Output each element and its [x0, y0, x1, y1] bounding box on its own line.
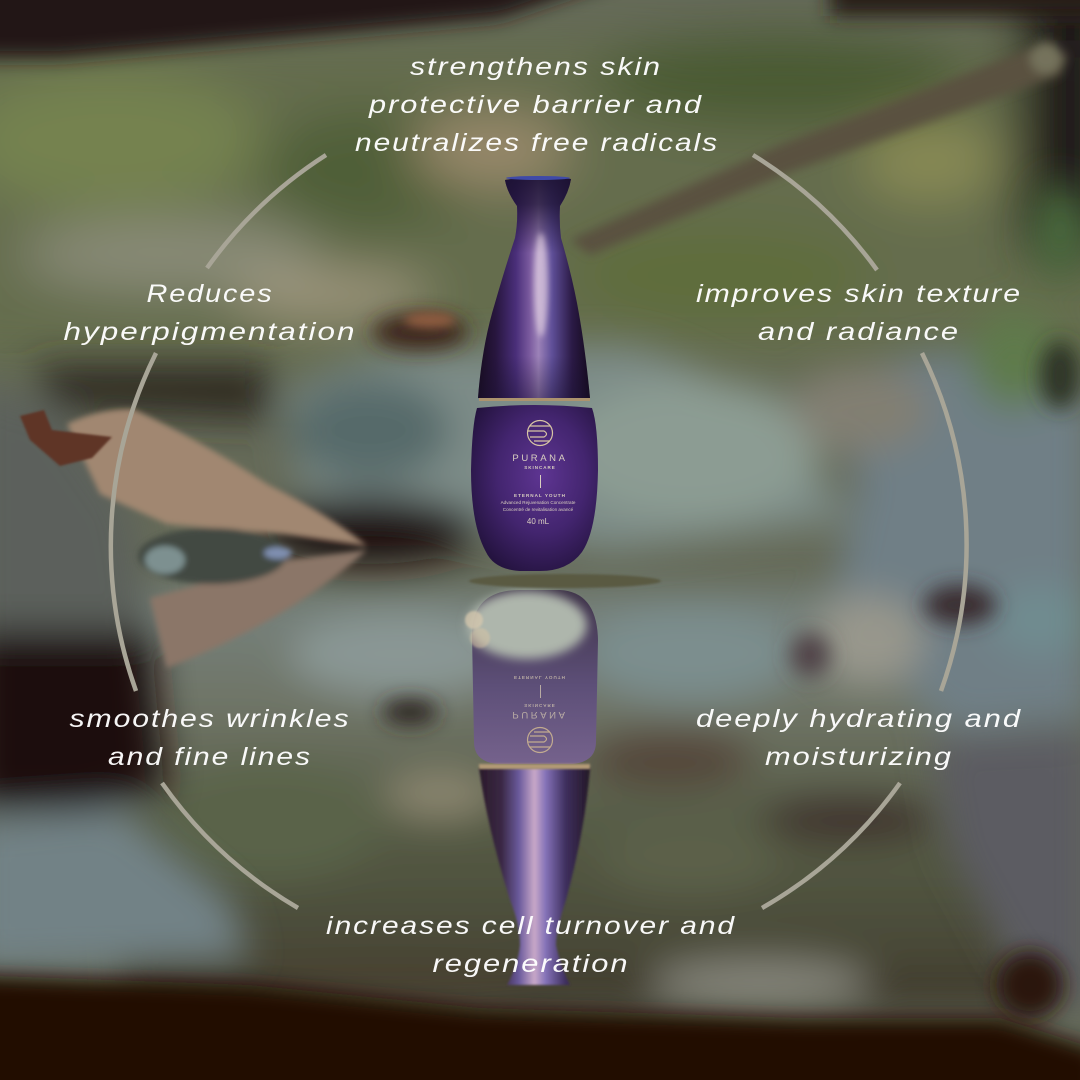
label: Advanced Rejuvenation Concentrate — [501, 500, 576, 505]
reflected label: SKINCARE — [524, 703, 556, 708]
bottle reflection — [465, 590, 598, 985]
body — [471, 405, 598, 571]
benefit: wrinkles: smoothes wrinkles — [70, 705, 350, 733]
label — [501, 420, 576, 526]
fallen leaf — [20, 410, 112, 466]
blurred rocks — [0, 180, 1080, 1020]
benefit: hydration: deeply hydrating and — [696, 705, 1022, 733]
benefit: hydration — [696, 705, 1022, 771]
label: Concentré de revitalisation avancé — [503, 507, 574, 512]
small dark patches — [372, 314, 1080, 1019]
label: ETERNAL YOUTH — [514, 493, 566, 498]
benefit: cell turnover: regeneration — [432, 950, 630, 978]
benefit: barrier: strengthens skin — [410, 53, 662, 81]
product bottle — [465, 176, 661, 985]
benefit: barrier: neutralizes free radicals — [355, 129, 719, 157]
cap — [478, 177, 590, 400]
label: 40 mL — [527, 517, 550, 526]
benefit labels — [64, 53, 1022, 978]
logo — [528, 420, 552, 446]
benefit: texture: and radiance — [758, 318, 960, 346]
leaf-shaped stone and branch — [67, 409, 367, 668]
benefit: cell turnover — [326, 912, 736, 978]
reflected label: ETERNAL YOUTH — [514, 675, 566, 680]
benefit: cell turnover: increases cell turnover and — [326, 912, 736, 940]
benefit: wrinkles: and fine lines — [108, 743, 312, 771]
benefit: texture: improves skin texture — [696, 280, 1022, 308]
top shadow band — [0, 0, 1080, 58]
stone under bottle — [469, 574, 661, 588]
benefit: texture — [696, 280, 1022, 346]
cap shading — [478, 177, 590, 400]
label: PURANA — [512, 453, 568, 464]
dark foreground boulder, left — [0, 380, 150, 640]
reflected label — [512, 675, 568, 752]
label: SKINCARE — [524, 465, 556, 470]
benefit: wrinkles — [70, 705, 350, 771]
gold band — [479, 398, 590, 401]
benefit: hydration: moisturizing — [765, 743, 953, 771]
forest backdrop — [0, 0, 1080, 370]
benefit: hyperpigmentation — [64, 280, 356, 346]
circle of arc segments — [111, 155, 967, 908]
benefit: barrier — [355, 53, 719, 157]
bottom shadow band — [0, 975, 1080, 1080]
water surface — [120, 590, 1020, 1010]
benefit: hyperpigmentation: Reduces — [146, 280, 274, 308]
benefit: barrier: protective barrier and — [368, 91, 703, 119]
benefit: hyperpigmentation: hyperpigmentation — [64, 318, 356, 346]
reflected label: PURANA — [512, 709, 568, 720]
